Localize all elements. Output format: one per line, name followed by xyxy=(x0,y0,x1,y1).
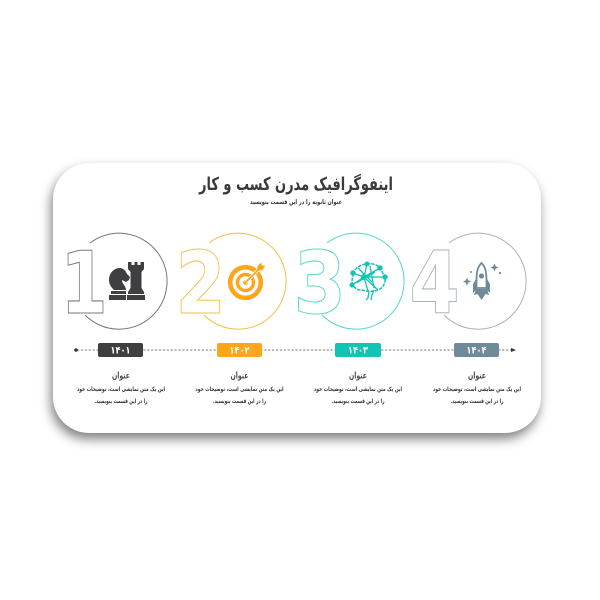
text block 2 xyxy=(196,372,284,405)
text block 4: این یک متن نمایشی است، توضیحات خود xyxy=(433,386,521,393)
timeline with start dot and end arrow xyxy=(74,348,516,352)
step 3 circle and digit xyxy=(294,233,404,333)
text block 1: را در این قسمت بنویسید. xyxy=(94,398,148,405)
year badge 1402: ۱۴۰۲ xyxy=(230,346,250,356)
step 3 circle and digit: 3 xyxy=(294,234,345,333)
text block 4 xyxy=(433,372,521,405)
icon: brain network xyxy=(350,262,388,300)
text block 2: را در این قسمت بنویسید. xyxy=(213,398,266,405)
text block 3: را در این قسمت بنویسید. xyxy=(332,398,385,405)
year badge 1401: ۱۴۰۱ xyxy=(110,346,130,356)
text block 3: عنوان xyxy=(349,372,367,382)
text block 1: این یک متن نمایشی است، توضیحات خود xyxy=(77,386,165,393)
step 4 circle and digit: 4 xyxy=(410,235,459,333)
step 1 circle and digit: 1 xyxy=(61,233,107,333)
step 1 circle and digit xyxy=(61,233,167,333)
text block 3 xyxy=(314,372,402,405)
year badge 1404: ۱۴۰۴ xyxy=(466,346,486,356)
text block 4: عنوان xyxy=(468,372,486,382)
text block 3: این یک متن نمایشی است، توضیحات خود xyxy=(314,386,402,393)
subtitle: عنوان ثانویه را در این قسمت بنویسید xyxy=(250,198,342,206)
year badge 1403: ۱۴۰۳ xyxy=(348,346,368,356)
text block 1 xyxy=(77,372,165,405)
step 2 circle and digit: 2 xyxy=(176,235,225,333)
icon: target with arrow xyxy=(230,262,266,298)
text block 4: را در این قسمت بنویسید. xyxy=(450,398,504,405)
step 3 circle and digit: 3 xyxy=(294,234,345,333)
icon: rocket and stars xyxy=(463,263,501,300)
year badge 1401 xyxy=(98,343,143,357)
year badge 1404 xyxy=(454,343,499,357)
step 2 circle and digit xyxy=(176,233,286,333)
text block 2: عنوان xyxy=(230,372,248,382)
step 4 circle and digit: 4 xyxy=(410,235,459,333)
text block 1: عنوان xyxy=(112,372,130,382)
year badge 1403 xyxy=(335,343,381,357)
icon: chess pieces xyxy=(109,262,145,300)
step 4 circle and digit xyxy=(410,233,526,333)
step 2 circle and digit: 2 xyxy=(176,235,225,333)
step 1 circle and digit: 1 xyxy=(61,233,107,333)
card background xyxy=(53,163,541,433)
text block 2: این یک متن نمایشی است، توضیحات خود xyxy=(196,386,284,393)
title: اینفوگرافیک مدرن کسب و کار xyxy=(198,173,393,195)
year badge 1402 xyxy=(217,343,262,357)
